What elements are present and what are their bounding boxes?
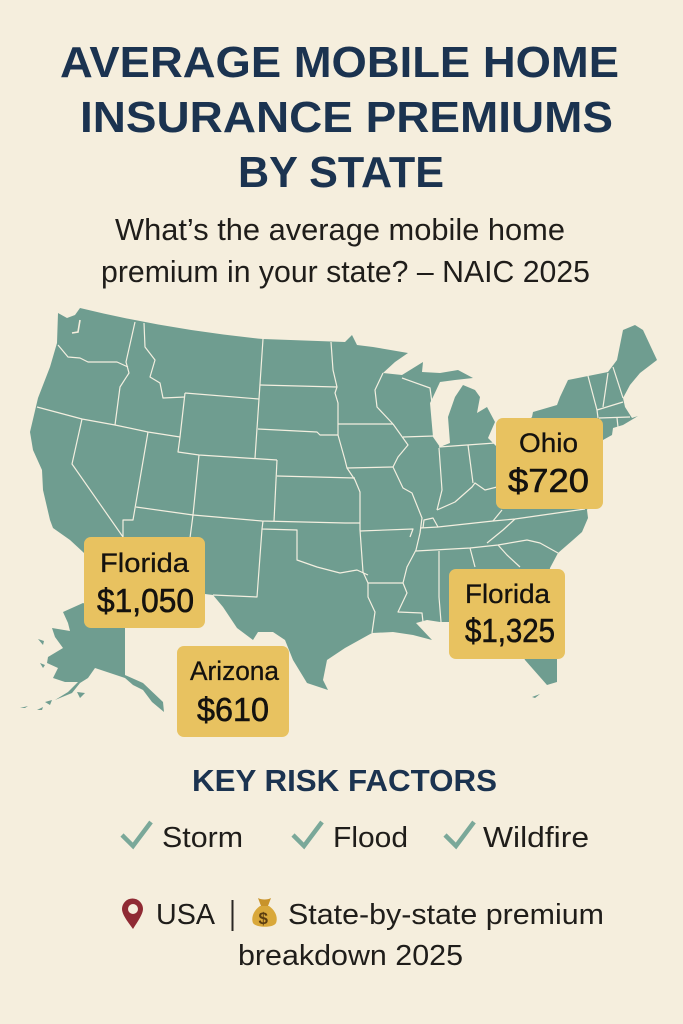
card: Florida $1,325 — [449, 569, 565, 659]
footer note — [122, 898, 604, 972]
card: Arizona $610: $610 — [197, 691, 269, 728]
card: Florida $1,050: Florida — [100, 548, 190, 578]
risk: flood — [293, 822, 408, 854]
risk: flood: Flood — [333, 822, 408, 854]
card: Florida $1,325: Florida — [465, 579, 551, 609]
Alaska islands — [20, 639, 540, 710]
card: Ohio $720: $720 — [508, 462, 589, 499]
icon: money bag — [252, 898, 277, 928]
separator — [232, 900, 234, 931]
subtitle — [101, 212, 590, 289]
title — [60, 38, 619, 197]
card: Florida $1,050: $1,050 — [97, 582, 194, 619]
card: Arizona $610: Arizona — [190, 656, 280, 686]
risk: storm: Storm — [162, 822, 243, 854]
footer text: USA: USA — [156, 899, 216, 931]
subtitle: premium in your state? – NAIC 2025 — [101, 254, 590, 289]
risk factors list — [122, 822, 589, 854]
card: Ohio $720: Ohio — [519, 428, 578, 458]
card: Florida $1,325: $1,325 — [465, 612, 555, 649]
title: BY STATE — [238, 148, 444, 197]
map of the United States — [20, 308, 657, 712]
card: Florida $1,050 — [84, 537, 205, 628]
icon: money bag: $ — [258, 909, 268, 928]
card: Ohio $720 — [496, 418, 603, 509]
footer text: state by state: State-by-state premium — [288, 899, 604, 931]
Puget Sound inlet — [72, 320, 80, 333]
Alaska — [47, 603, 164, 712]
card: Arizona $610 — [177, 646, 289, 737]
title: AVERAGE MOBILE HOME — [60, 38, 619, 87]
footer text: breakdown 2025: breakdown 2025 — [238, 940, 463, 972]
heading: key risk factors: KEY RISK FACTORS — [192, 763, 497, 798]
title: INSURANCE PREMIUMS — [80, 93, 613, 142]
risk: wildfire: Wildfire — [483, 822, 589, 854]
state borders — [37, 322, 630, 633]
subtitle: What’s the average mobile home — [115, 212, 565, 247]
contiguous states landmass — [30, 308, 657, 690]
risk: wildfire — [445, 822, 589, 854]
icon: location pin — [122, 898, 143, 929]
risk: storm — [122, 822, 243, 854]
